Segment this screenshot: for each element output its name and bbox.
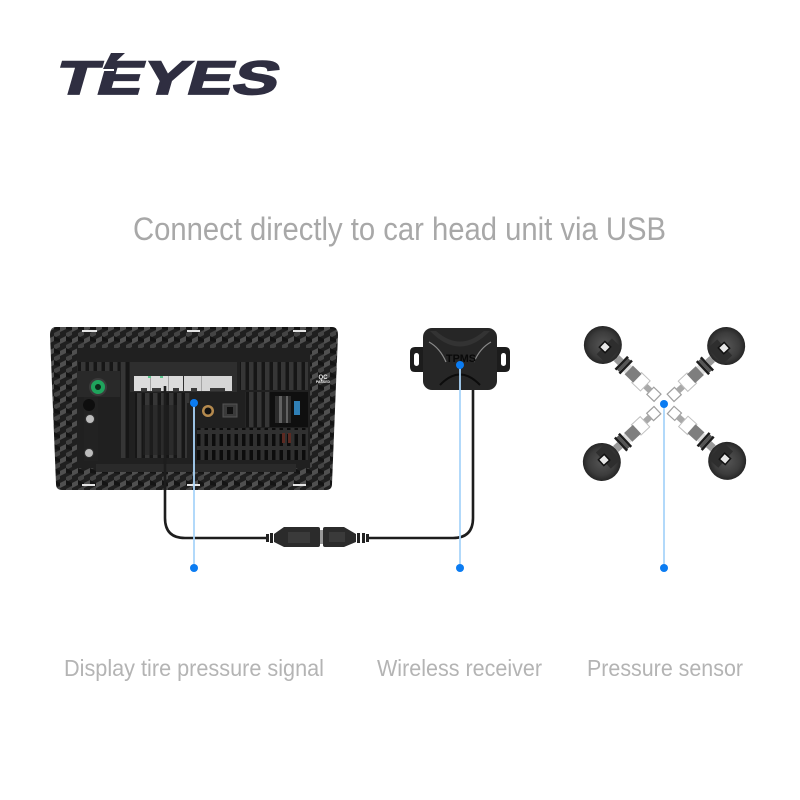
head unit rear panel	[50, 327, 338, 490]
antenna sockets	[83, 397, 98, 461]
cable: receiver to USB	[368, 390, 473, 538]
label: receiver: Wireless receiver	[377, 655, 542, 681]
label: TPMS: TPMS	[446, 353, 476, 365]
label: QC PASSED: PASSED	[316, 380, 331, 384]
bottom fins	[197, 428, 308, 460]
pressure sensors	[575, 318, 754, 489]
label: QC PASSED	[316, 375, 331, 384]
label: display: Display tire pressure signal	[64, 655, 324, 681]
icon: green antenna socket	[89, 378, 107, 396]
callout line: sensor	[660, 400, 668, 572]
callout line: display	[190, 399, 198, 572]
white connectors	[134, 376, 232, 391]
mounting tabs	[82, 330, 306, 486]
label: sensor: Pressure sensor	[587, 655, 743, 681]
USB connector pair	[266, 527, 369, 547]
top right fins	[240, 362, 308, 390]
callout line: receiver	[456, 361, 464, 572]
TPMS wireless receiver	[410, 328, 510, 390]
label: QC PASSED: QC	[318, 375, 328, 381]
top connector recess	[130, 362, 237, 392]
title: Connect directly to car head unit via USB	[133, 211, 666, 247]
cable: head unit to USB	[165, 386, 268, 538]
multi-pin connector	[270, 392, 308, 427]
logo: TEYES: TEYES	[50, 53, 287, 105]
left fins and antenna block	[77, 362, 120, 371]
audio ports	[202, 404, 237, 417]
heatsink left	[135, 393, 190, 403]
inner plate	[77, 348, 310, 468]
